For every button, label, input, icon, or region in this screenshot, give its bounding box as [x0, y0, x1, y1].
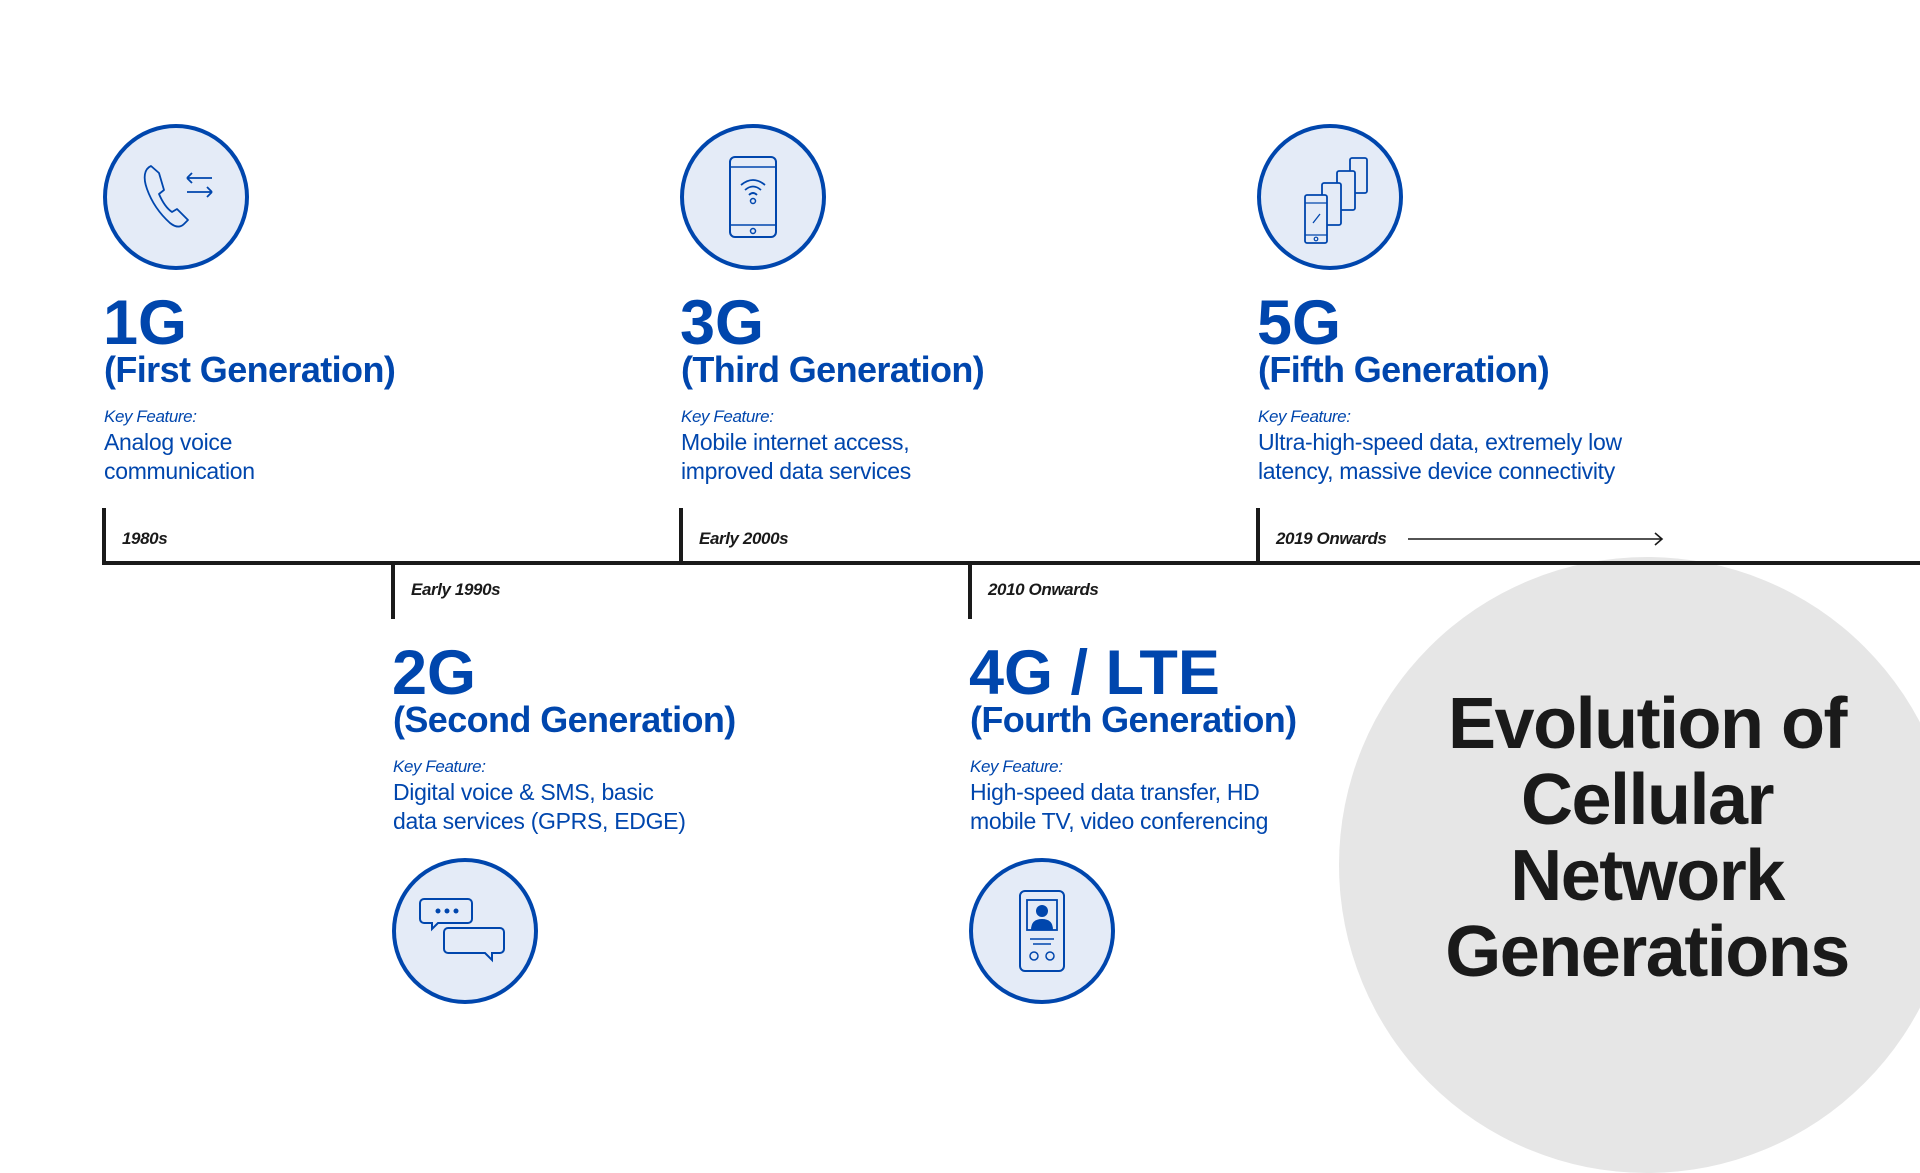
panel: 2G	[392, 638, 736, 834]
panel: 1G	[103, 288, 395, 484]
label: key feature: Key Feature:	[1258, 407, 1351, 426]
background circle	[1339, 557, 1920, 1173]
heading: 4G: 4G / LTE	[969, 638, 1220, 708]
timeline axis	[102, 561, 1920, 565]
icon: 5G devices	[1257, 124, 1403, 270]
text: description: Analog voice	[104, 429, 232, 455]
arrow: onwards	[1408, 532, 1664, 546]
icon: 1G phone	[103, 124, 249, 270]
text: description	[1258, 429, 1622, 484]
text: description: Digital voice & SMS, basic	[393, 779, 654, 805]
text: description: data services (GPRS, EDGE)	[393, 808, 686, 834]
heading: 3G: 3G	[680, 288, 764, 358]
text: description: Mobile internet access,	[681, 429, 909, 455]
label: key feature: Key Feature:	[970, 757, 1063, 776]
date: 1980s: 1980s	[122, 529, 167, 548]
subheading: (Second Generation)	[393, 699, 736, 740]
text: description: communication	[104, 458, 255, 484]
subheading: (Fourth Generation)	[970, 699, 1297, 740]
date: 2010 Onwards: 2010 Onwards	[988, 580, 1098, 599]
tick: 5G	[1256, 508, 1260, 564]
text: description	[104, 429, 255, 484]
date: Early 1990s: Early 1990s	[411, 580, 500, 599]
date: 2019 Onwards: 2019 Onwards	[1276, 529, 1386, 548]
text: description: improved data services	[681, 458, 911, 484]
text: description	[393, 779, 686, 834]
text: description	[681, 429, 911, 484]
panel: 4G	[969, 638, 1297, 834]
tick: 2G	[391, 562, 395, 619]
panel: 3G	[680, 288, 984, 484]
title: Evolution of Cellular Network Generations	[1445, 684, 1849, 992]
subheading: (Fifth Generation)	[1258, 349, 1549, 390]
tick: 3G	[679, 508, 683, 564]
panel: 5G	[1257, 288, 1622, 484]
label: key feature: Key Feature:	[681, 407, 774, 426]
heading: 1G: 1G	[103, 288, 187, 358]
label: key feature: Key Feature:	[393, 757, 486, 776]
icon: 3G smartphone wifi	[680, 124, 826, 270]
text: description	[970, 779, 1268, 834]
subheading: (Third Generation)	[681, 349, 984, 390]
label: key feature: Key Feature:	[104, 407, 197, 426]
heading: 2G: 2G	[392, 638, 476, 708]
tick: 1G	[102, 508, 106, 564]
text: description: Ultra-high-speed data, extremely low	[1258, 429, 1622, 455]
text: description: High-speed data transfer, HD	[970, 779, 1259, 805]
text: description: mobile TV, video conferencing	[970, 808, 1268, 834]
date: Early 2000s: Early 2000s	[699, 529, 788, 548]
icon: 2G chat	[392, 858, 538, 1004]
icon: 4G video call	[969, 858, 1115, 1004]
tick: 4G	[968, 562, 972, 619]
text: description: latency, massive device connectivity	[1258, 458, 1615, 484]
subheading: (First Generation)	[104, 349, 395, 390]
heading: 5G: 5G	[1257, 288, 1341, 358]
